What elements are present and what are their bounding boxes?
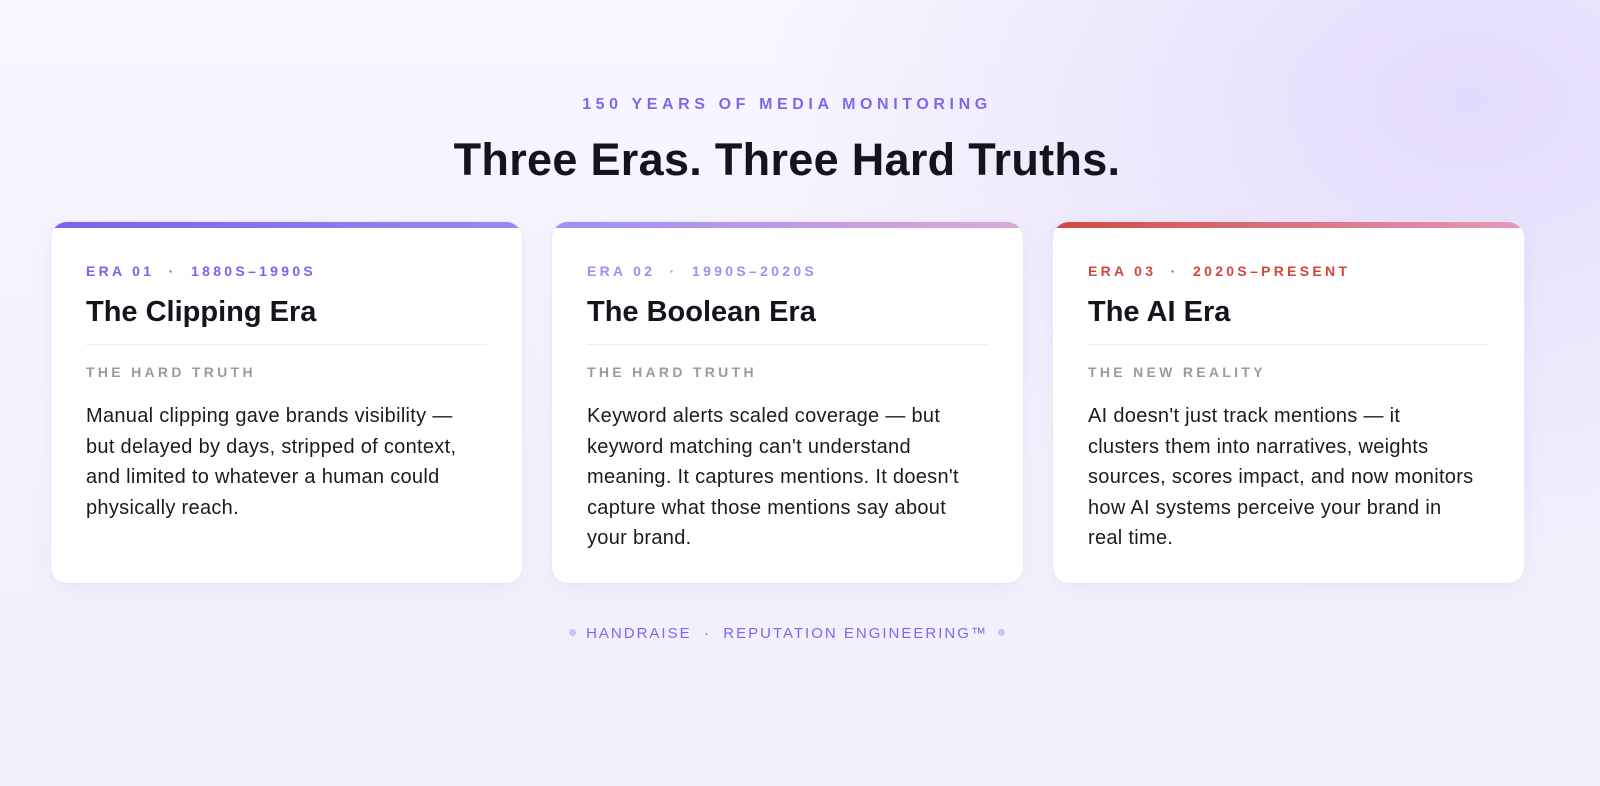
body text: meaning. It captures mentions. It doesn't	[587, 466, 959, 488]
title: Three Eras. Three Hard Truths.	[454, 134, 1120, 185]
body text: clusters them into narratives, weights	[1088, 436, 1428, 458]
card title: The AI Era	[1088, 296, 1230, 328]
card title: The Clipping Era	[86, 296, 316, 328]
section label: THE HARD TRUTH	[86, 364, 256, 380]
body text	[1088, 405, 1474, 549]
body text: how AI systems perceive your brand in	[1088, 497, 1441, 519]
section label: THE NEW REALITY	[1088, 364, 1266, 380]
body text: real time.	[1088, 527, 1173, 549]
era label: ERA 03 · 2020S–PRESENT	[1088, 263, 1350, 279]
body text	[86, 405, 456, 519]
body text: AI doesn't just track mentions — it	[1088, 405, 1400, 427]
body text: capture what those mentions say about	[587, 497, 946, 519]
panel: era 02	[552, 222, 1023, 583]
era label: ERA 02 · 1990S–2020S	[587, 263, 817, 279]
body text: and limited to whatever a human could	[86, 466, 440, 488]
panel: era 03	[1053, 222, 1524, 583]
body text: but delayed by days, stripped of context,	[86, 436, 456, 458]
body text: sources, scores impact, and now monitors	[1088, 466, 1474, 488]
era label: ERA 01 · 1880S–1990S	[86, 263, 316, 279]
body text	[587, 405, 959, 549]
body text: Keyword alerts scaled coverage — but	[587, 405, 940, 427]
footer: HANDRAISE · REPUTATION ENGINEERING™	[586, 625, 988, 642]
body text: Manual clipping gave brands visibility —	[86, 405, 453, 427]
body text: physically reach.	[86, 497, 239, 519]
kicker: 150 YEARS OF MEDIA MONITORING	[582, 96, 992, 113]
section label: THE HARD TRUTH	[587, 364, 757, 380]
body text: your brand.	[587, 527, 691, 549]
body text: keyword matching can't understand	[587, 436, 911, 458]
card title: The Boolean Era	[587, 296, 816, 328]
panel: era 01	[51, 222, 522, 583]
